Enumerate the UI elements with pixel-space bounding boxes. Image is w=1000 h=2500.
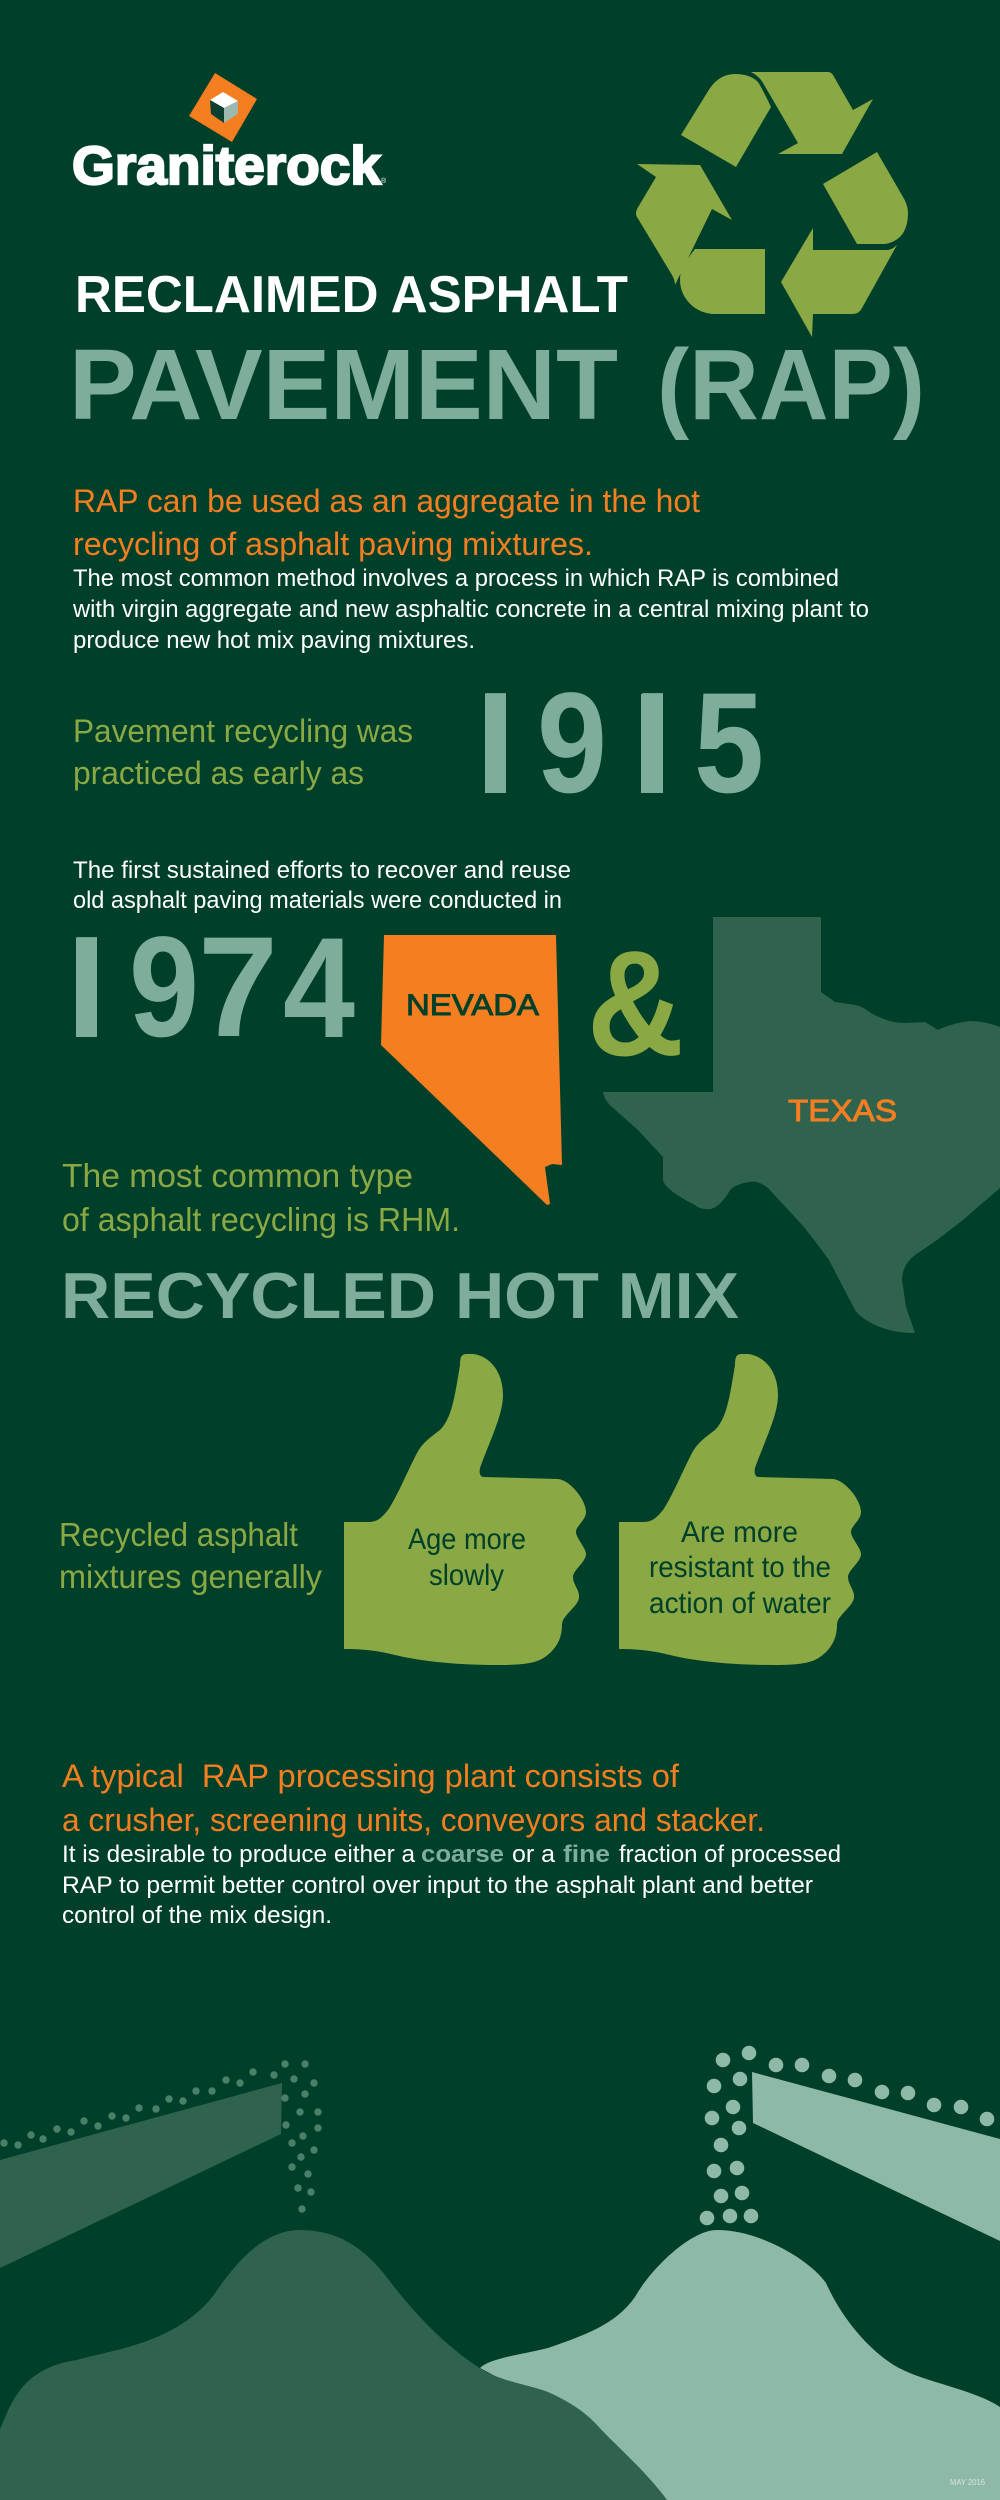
text block: most common type: The most common type: [62, 1157, 413, 1194]
callout text: practiced as early as: [73, 755, 364, 791]
conveyor: right: [752, 2072, 1000, 2241]
body copy: with virgin aggregate and new asphaltic concrete in a central mixing plant to: [72, 596, 869, 623]
date note: MAY 2016: [950, 2478, 986, 2487]
thumb label: [408, 1523, 526, 1592]
big year 1974: 1: [43, 909, 123, 1068]
text block: recycled asphalt mixtures generally: [59, 1516, 322, 1595]
ampersand: &: [587, 919, 684, 1087]
heading line: Pavement (RAP): PAVEMENT: [69, 329, 618, 441]
subheading: A typical RAP processing plant consists of: [62, 1758, 679, 1794]
stockpile: coarse: [0, 2230, 667, 2500]
subheading: [62, 1758, 765, 1838]
subheading: a crusher, screening units, conveyors and stacker.: [62, 1802, 765, 1838]
body copy: fine: [563, 1841, 610, 1868]
thumb label: Are more: [681, 1516, 798, 1549]
dots: fine falling material: [700, 2046, 994, 2225]
thumb label: slowly: [429, 1559, 504, 1592]
logo: Graniterock: [72, 73, 387, 196]
subheading: [73, 483, 700, 562]
map: Nevada: [381, 935, 562, 1205]
body copy: produce new hot mix paving mixtures.: [73, 627, 475, 654]
body copy: control of the mix design.: [62, 1902, 332, 1929]
stockpile: fine: [480, 2230, 1000, 2500]
big year 1915: [485, 692, 760, 794]
body copy: [72, 565, 869, 654]
body copy: fraction of processed: [619, 1841, 841, 1868]
wordmark: ®: [381, 177, 387, 185]
text block: most common type: [62, 1157, 460, 1238]
icon: thumbs up: [619, 1354, 861, 1665]
subheading: RAP can be used as an aggregate in the hot: [73, 483, 700, 519]
title: Reclaimed Asphalt Pavement (RAP): [69, 266, 925, 441]
text block: first sustained efforts: [73, 857, 571, 914]
callout text: [73, 713, 413, 791]
body copy: RAP to permit better control over input to the asphalt plant and better: [62, 1872, 813, 1899]
thumb label: Age more: [408, 1523, 526, 1556]
illustration: coarse conveyor and dots: [0, 2060, 322, 2268]
wordmark: Graniterock: [72, 136, 382, 196]
heading line: Reclaimed Asphalt: RECLAIMED ASPHALT: [75, 266, 628, 324]
label: Nevada: NEVADA: [406, 989, 539, 1022]
body copy: or a: [512, 1841, 556, 1868]
dots: coarse falling material: [0, 2060, 322, 2213]
conveyor: left: [0, 2083, 282, 2268]
body copy: coarse: [421, 1841, 504, 1868]
icon: orange diamond with cube: [189, 73, 257, 142]
heading line: Pavement (RAP): (RAP): [657, 329, 925, 441]
body copy: It is desirable to produce either a: [62, 1841, 416, 1868]
thumb label: action of water: [649, 1587, 831, 1620]
big year 1974: 7: [198, 908, 278, 1067]
big year 1915: 1: [452, 665, 532, 824]
icon: thumbs up: [344, 1354, 586, 1665]
text block: recycled asphalt mixtures generally: Recycled asphalt: [59, 1516, 298, 1553]
callout text: Pavement recycling was: [73, 713, 413, 749]
big year 1915: 9: [537, 664, 607, 823]
thumb: age more slowly: [344, 1354, 586, 1665]
thumb label: resistant to the: [649, 1551, 831, 1584]
map: Texas: [603, 917, 1000, 1333]
label: Texas: TEXAS: [788, 1093, 897, 1128]
callout: pavement recycling 1915: [75, 692, 760, 794]
text block: recycled asphalt mixtures generally: mixtures generally: [59, 1558, 322, 1595]
text block: first sustained efforts: old asphalt paving materials were conducted in: [73, 887, 562, 914]
big year 1974: 9: [129, 908, 199, 1067]
big year 1974: [76, 936, 354, 1038]
heading line: Pavement (RAP): [69, 329, 925, 441]
thumb: more resistant to water: [619, 1354, 861, 1665]
big year 1915: 5: [694, 664, 764, 823]
thumb label: [649, 1516, 831, 1620]
heading: Recycled Hot Mix: RECYCLED HOT MIX: [61, 1259, 739, 1332]
text block: typical RAP processing plant: [62, 1758, 841, 1929]
big year 1915: 1: [609, 665, 689, 824]
body copy: The most common method involves a process in which RAP is combined: [73, 565, 839, 592]
big year 1974: 4: [283, 909, 355, 1068]
illustration: fine conveyor and dots: [700, 2046, 1000, 2241]
body copy: [62, 1841, 841, 1929]
icon: recycling symbol: [636, 72, 908, 337]
subheading: recycling of asphalt paving mixtures.: [73, 526, 593, 562]
text block: most common type: of asphalt recycling is RHM.: [62, 1201, 460, 1238]
text block: RAP aggregate use: [72, 483, 869, 654]
text block: first sustained efforts: The first sustained efforts to recover and reuse: [73, 857, 571, 884]
